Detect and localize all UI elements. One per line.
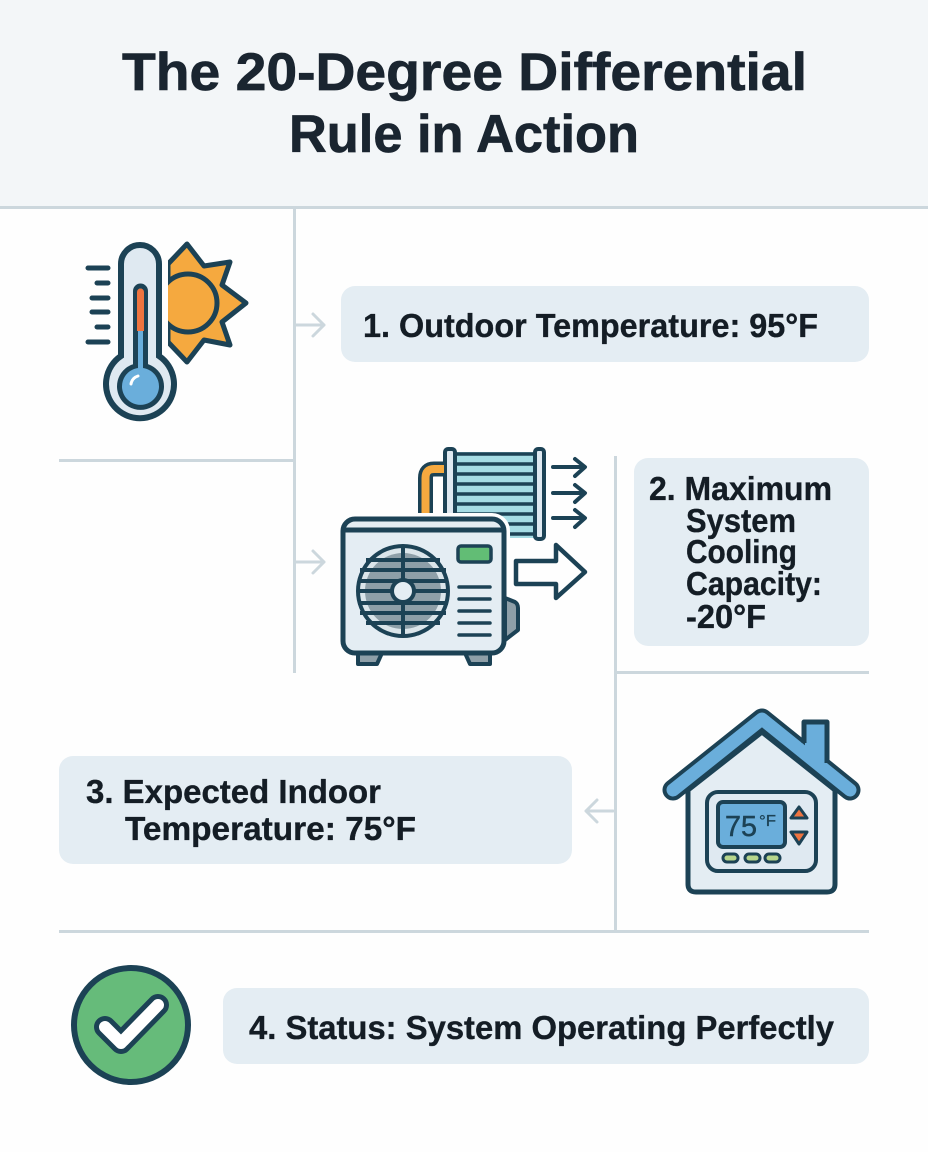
icon: house with thermostat: 75 <box>725 811 757 843</box>
icon: green check mark <box>74 968 188 1082</box>
panel: maximum system cooling capacity: 2. Maximum <box>649 470 832 507</box>
fan grille <box>358 546 448 636</box>
panel: outdoor temperature <box>341 286 869 362</box>
walls <box>688 732 835 892</box>
status display <box>458 546 491 562</box>
large output arrow <box>516 545 585 598</box>
icon: house with thermostat: °F <box>759 813 776 830</box>
arrow: to air conditioner <box>296 551 324 573</box>
panel: maximum system cooling capacity <box>634 458 869 646</box>
header band with title <box>0 0 928 209</box>
arrow: to expected indoor temperature <box>586 800 613 822</box>
panel: maximum system cooling capacity: Cooling <box>686 533 797 570</box>
panel: expected indoor temperature <box>59 756 572 864</box>
panel: status <box>223 988 869 1064</box>
sun <box>159 238 246 366</box>
arrow: to outdoor temperature <box>296 314 324 336</box>
icon: thermometer and sun <box>88 238 246 418</box>
condenser coil <box>426 449 544 539</box>
panel: outdoor temperature: 1. Outdoor Temperature: 95°F <box>363 307 818 344</box>
side box and feet <box>505 598 518 640</box>
unit body <box>343 519 504 653</box>
icon: house with thermostat <box>673 719 850 892</box>
thermostat <box>707 792 816 871</box>
panel: expected indoor temperature: 3. Expected Indoor <box>86 773 381 810</box>
vent lines <box>459 587 490 635</box>
panel: maximum system cooling capacity: -20°F <box>686 598 766 635</box>
panel: status: 4. Status: System Operating Perfectly <box>249 1009 835 1046</box>
chimney <box>805 722 826 766</box>
airflow arrows <box>553 459 585 527</box>
header band with title: The 20-Degree Differential <box>122 43 807 102</box>
icon: outdoor AC unit with coil <box>343 449 585 664</box>
tick marks <box>88 268 108 342</box>
panel: expected indoor temperature: Temperature: 75°F <box>125 810 416 847</box>
roof <box>673 719 850 790</box>
white halo around the unit <box>343 519 504 653</box>
header band with title: Rule in Action <box>289 105 639 164</box>
thermometer body <box>106 245 174 418</box>
panel: maximum system cooling capacity: Capacity: <box>686 565 822 602</box>
panel: maximum system cooling capacity: System <box>686 502 796 539</box>
